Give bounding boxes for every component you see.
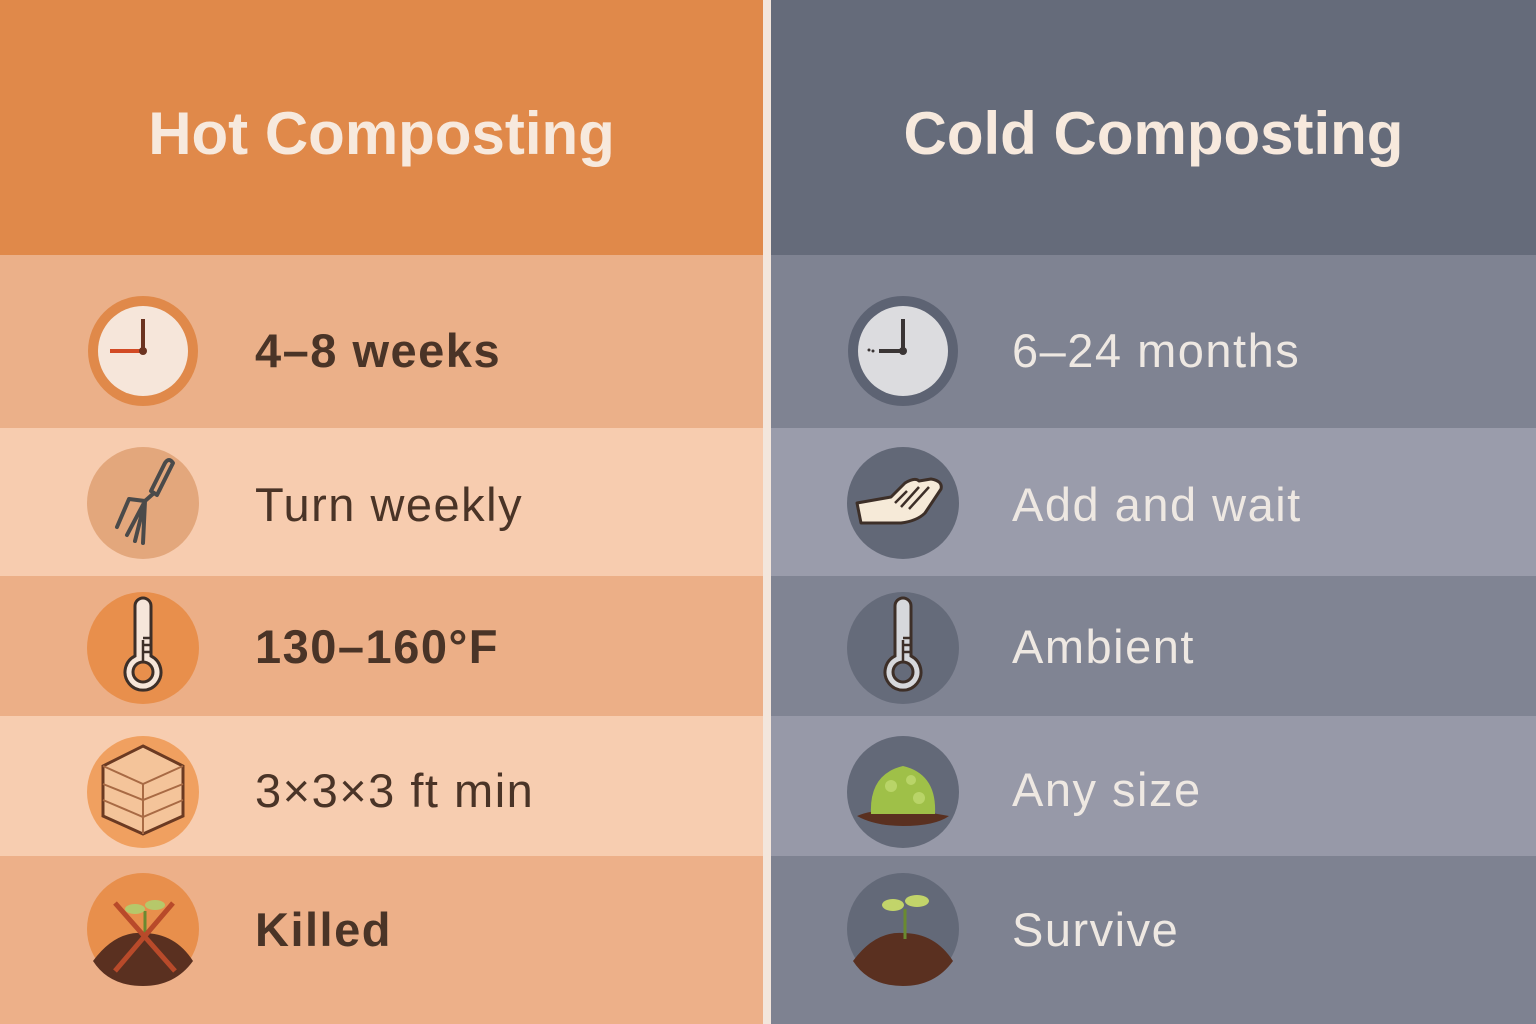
- text: turn weekly: Turn weekly: [255, 478, 523, 531]
- heading: cold: [771, 0, 1536, 255]
- text: killed: Killed: [255, 903, 392, 956]
- text: 3x3x3 ft min: 3×3×3 ft min: [255, 764, 534, 817]
- icon: clock hot: [88, 296, 198, 406]
- icon: thermometer cold: [847, 592, 959, 704]
- text: temperature hot: 130–160°F: [255, 620, 499, 673]
- icon: thermometer hot: [87, 592, 199, 704]
- panel: hot composting: [0, 0, 763, 1024]
- panel: cold composting: [771, 0, 1536, 1024]
- icon: cube: [87, 736, 199, 848]
- icon: seedling: [847, 873, 959, 986]
- text: 4-8 weeks: 4–8 weeks: [255, 324, 501, 377]
- heading: hot: [0, 0, 763, 255]
- heading: cold: Cold Composting: [904, 100, 1403, 167]
- text: ambient: Ambient: [1012, 620, 1195, 673]
- text: add and wait: Add and wait: [1012, 478, 1302, 531]
- text: 6-24 months: 6–24 months: [1012, 324, 1300, 377]
- text: survive: Survive: [1012, 903, 1179, 956]
- heading: hot: Hot Composting: [148, 100, 615, 167]
- icon: clock cold: [848, 296, 958, 406]
- text: any size: Any size: [1012, 763, 1202, 816]
- icon: killed seedling: [87, 873, 199, 986]
- icon: fork: [87, 447, 199, 559]
- icon: hand: [847, 447, 959, 559]
- icon: pile: [847, 736, 959, 848]
